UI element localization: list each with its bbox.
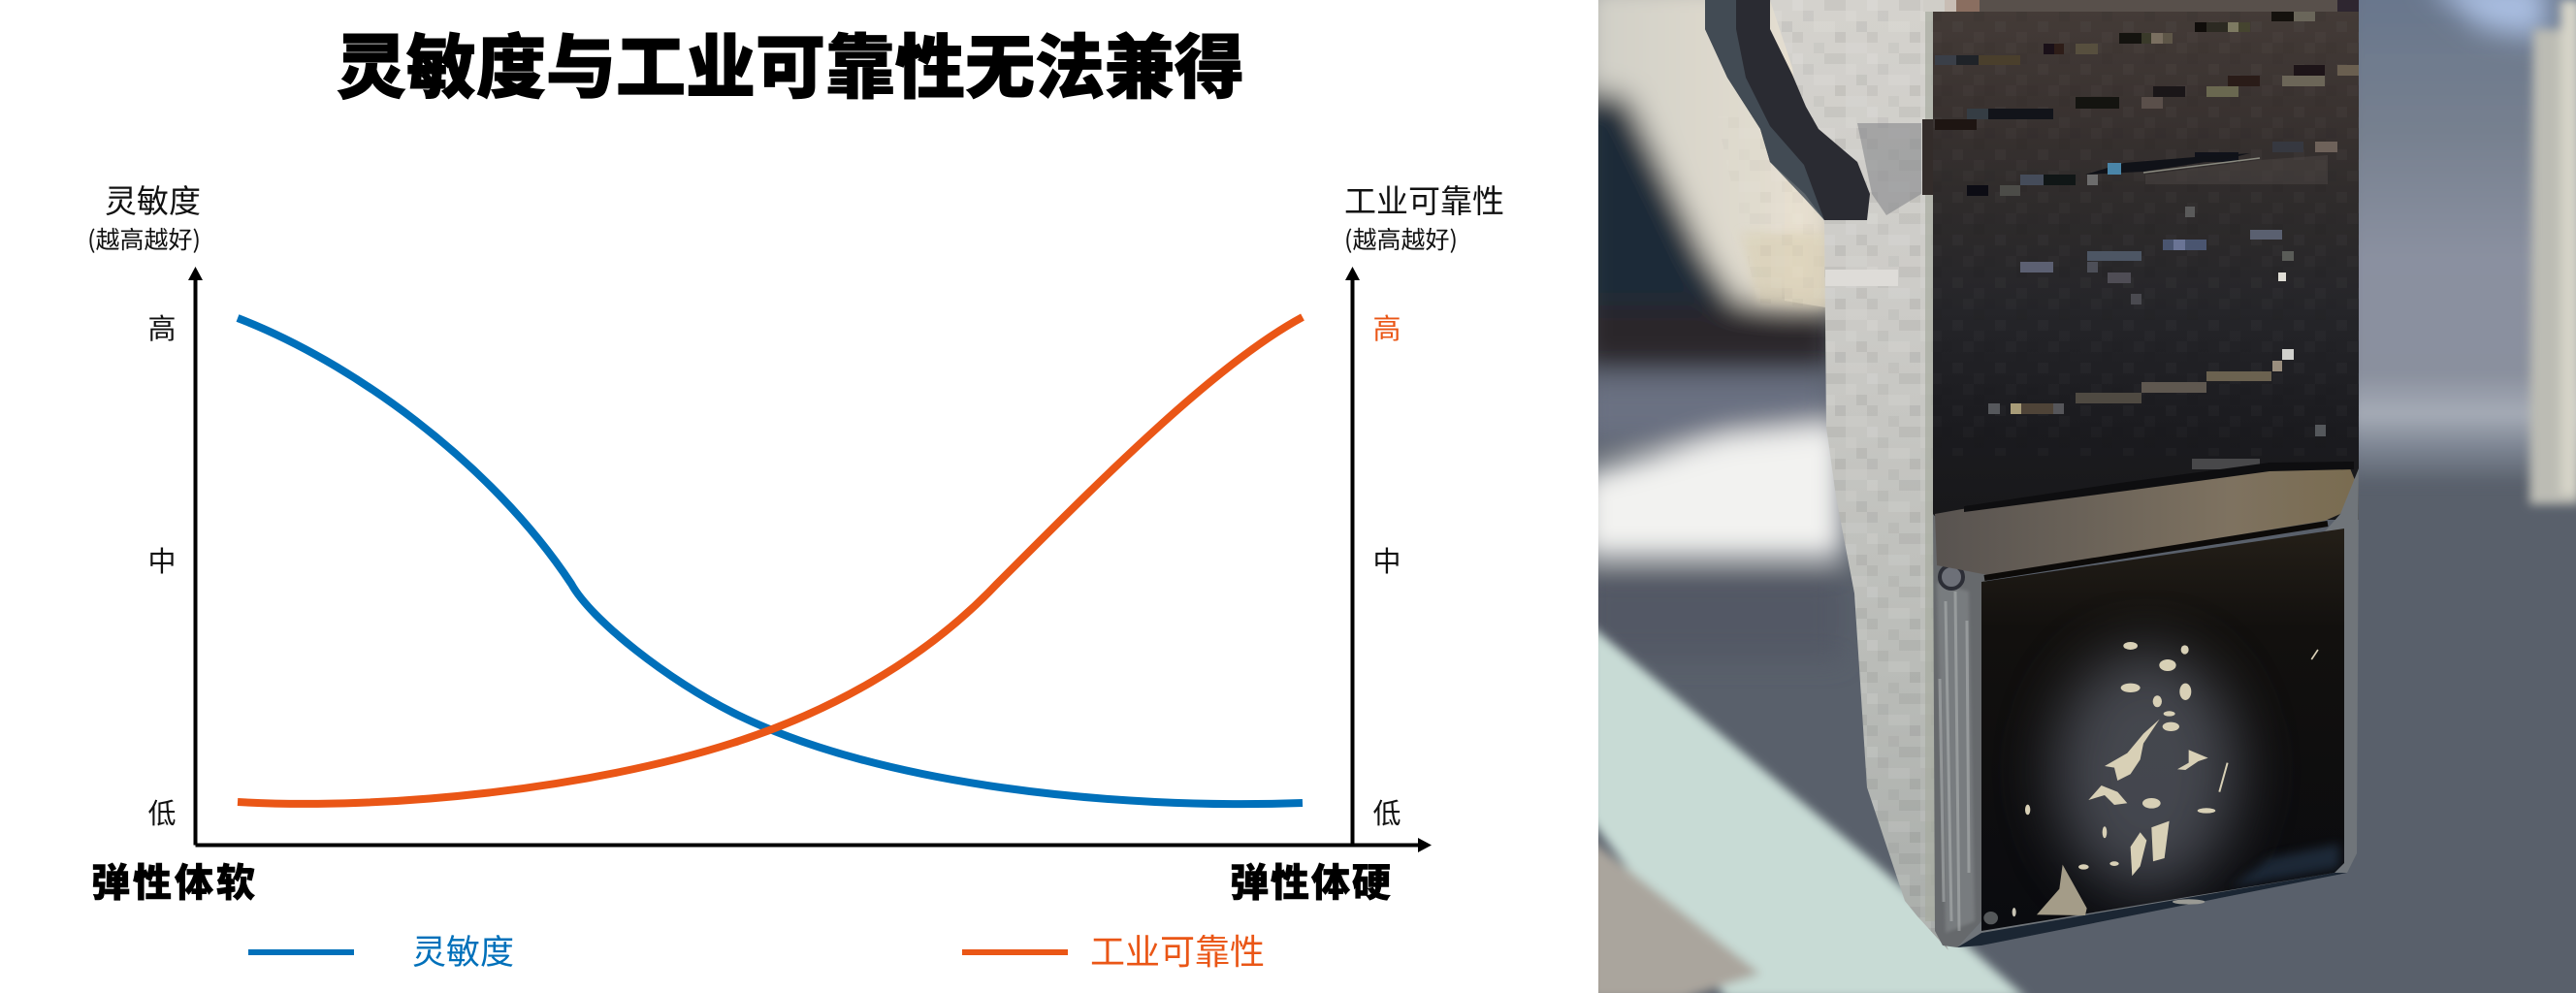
title: 灵敏度与工业可靠性无法兼得 (337, 11, 1244, 112)
left axis ticks: 高 (147, 306, 177, 347)
white haze on face (2054, 650, 2339, 892)
curve: sensitivity (238, 318, 1303, 804)
right axis title (1344, 176, 1504, 256)
legend: industrial reliability: 工业可靠性 (1090, 924, 1265, 975)
right axis ticks (1372, 306, 1401, 832)
x axis label: hard elastomer: 弹性体硬 (1230, 851, 1393, 908)
right axis title: 工业可靠性 (1344, 176, 1504, 222)
black sample body, pixelated (1923, 0, 2359, 520)
left axis ticks: 低 (147, 791, 177, 832)
chart: sensitivity versus industrial reliability (87, 176, 1504, 975)
pixel speckles on body (1935, 12, 2359, 469)
right axis title: (越高越好) (1344, 221, 1458, 256)
axes with arrows (188, 267, 1432, 852)
right edge light strip (2529, 0, 2576, 504)
dark cable, pixelated (1705, 0, 1870, 220)
bright flakes on face (2025, 642, 2318, 905)
glue band dark seam (1964, 462, 2354, 512)
left axis title: (越高越好) (87, 221, 201, 256)
legend: sensitivity: 灵敏度 (412, 925, 514, 975)
legend: industrial reliability (962, 924, 1265, 975)
right axis ticks: 低 (1372, 791, 1401, 832)
right axis ticks: 中 (1372, 539, 1401, 580)
left axis ticks (147, 306, 177, 832)
left axis ticks: 中 (147, 539, 177, 580)
legend: sensitivity (248, 925, 514, 975)
black sample face (1981, 529, 2344, 931)
mint window frame band (1591, 625, 2027, 993)
right axis ticks: 高 (1372, 306, 1401, 347)
chipped corner flake (1983, 865, 2087, 924)
outer edge of sample (1957, 468, 2359, 947)
clear resin side edge (1933, 514, 1988, 947)
curve: industrial reliability (238, 317, 1303, 804)
photo background (1581, 0, 2576, 993)
photo: sensor sample with peeled coating (1581, 0, 2576, 993)
x axis label: soft elastomer: 弹性体软 (91, 851, 258, 908)
golden glue top band (1935, 467, 2357, 575)
left axis title: 灵敏度 (105, 176, 201, 222)
left axis title (87, 176, 201, 256)
seam under glue band (1984, 524, 2328, 578)
bottom edge dark band (1957, 873, 2347, 947)
pixelated side of sample post (1770, 0, 1948, 950)
